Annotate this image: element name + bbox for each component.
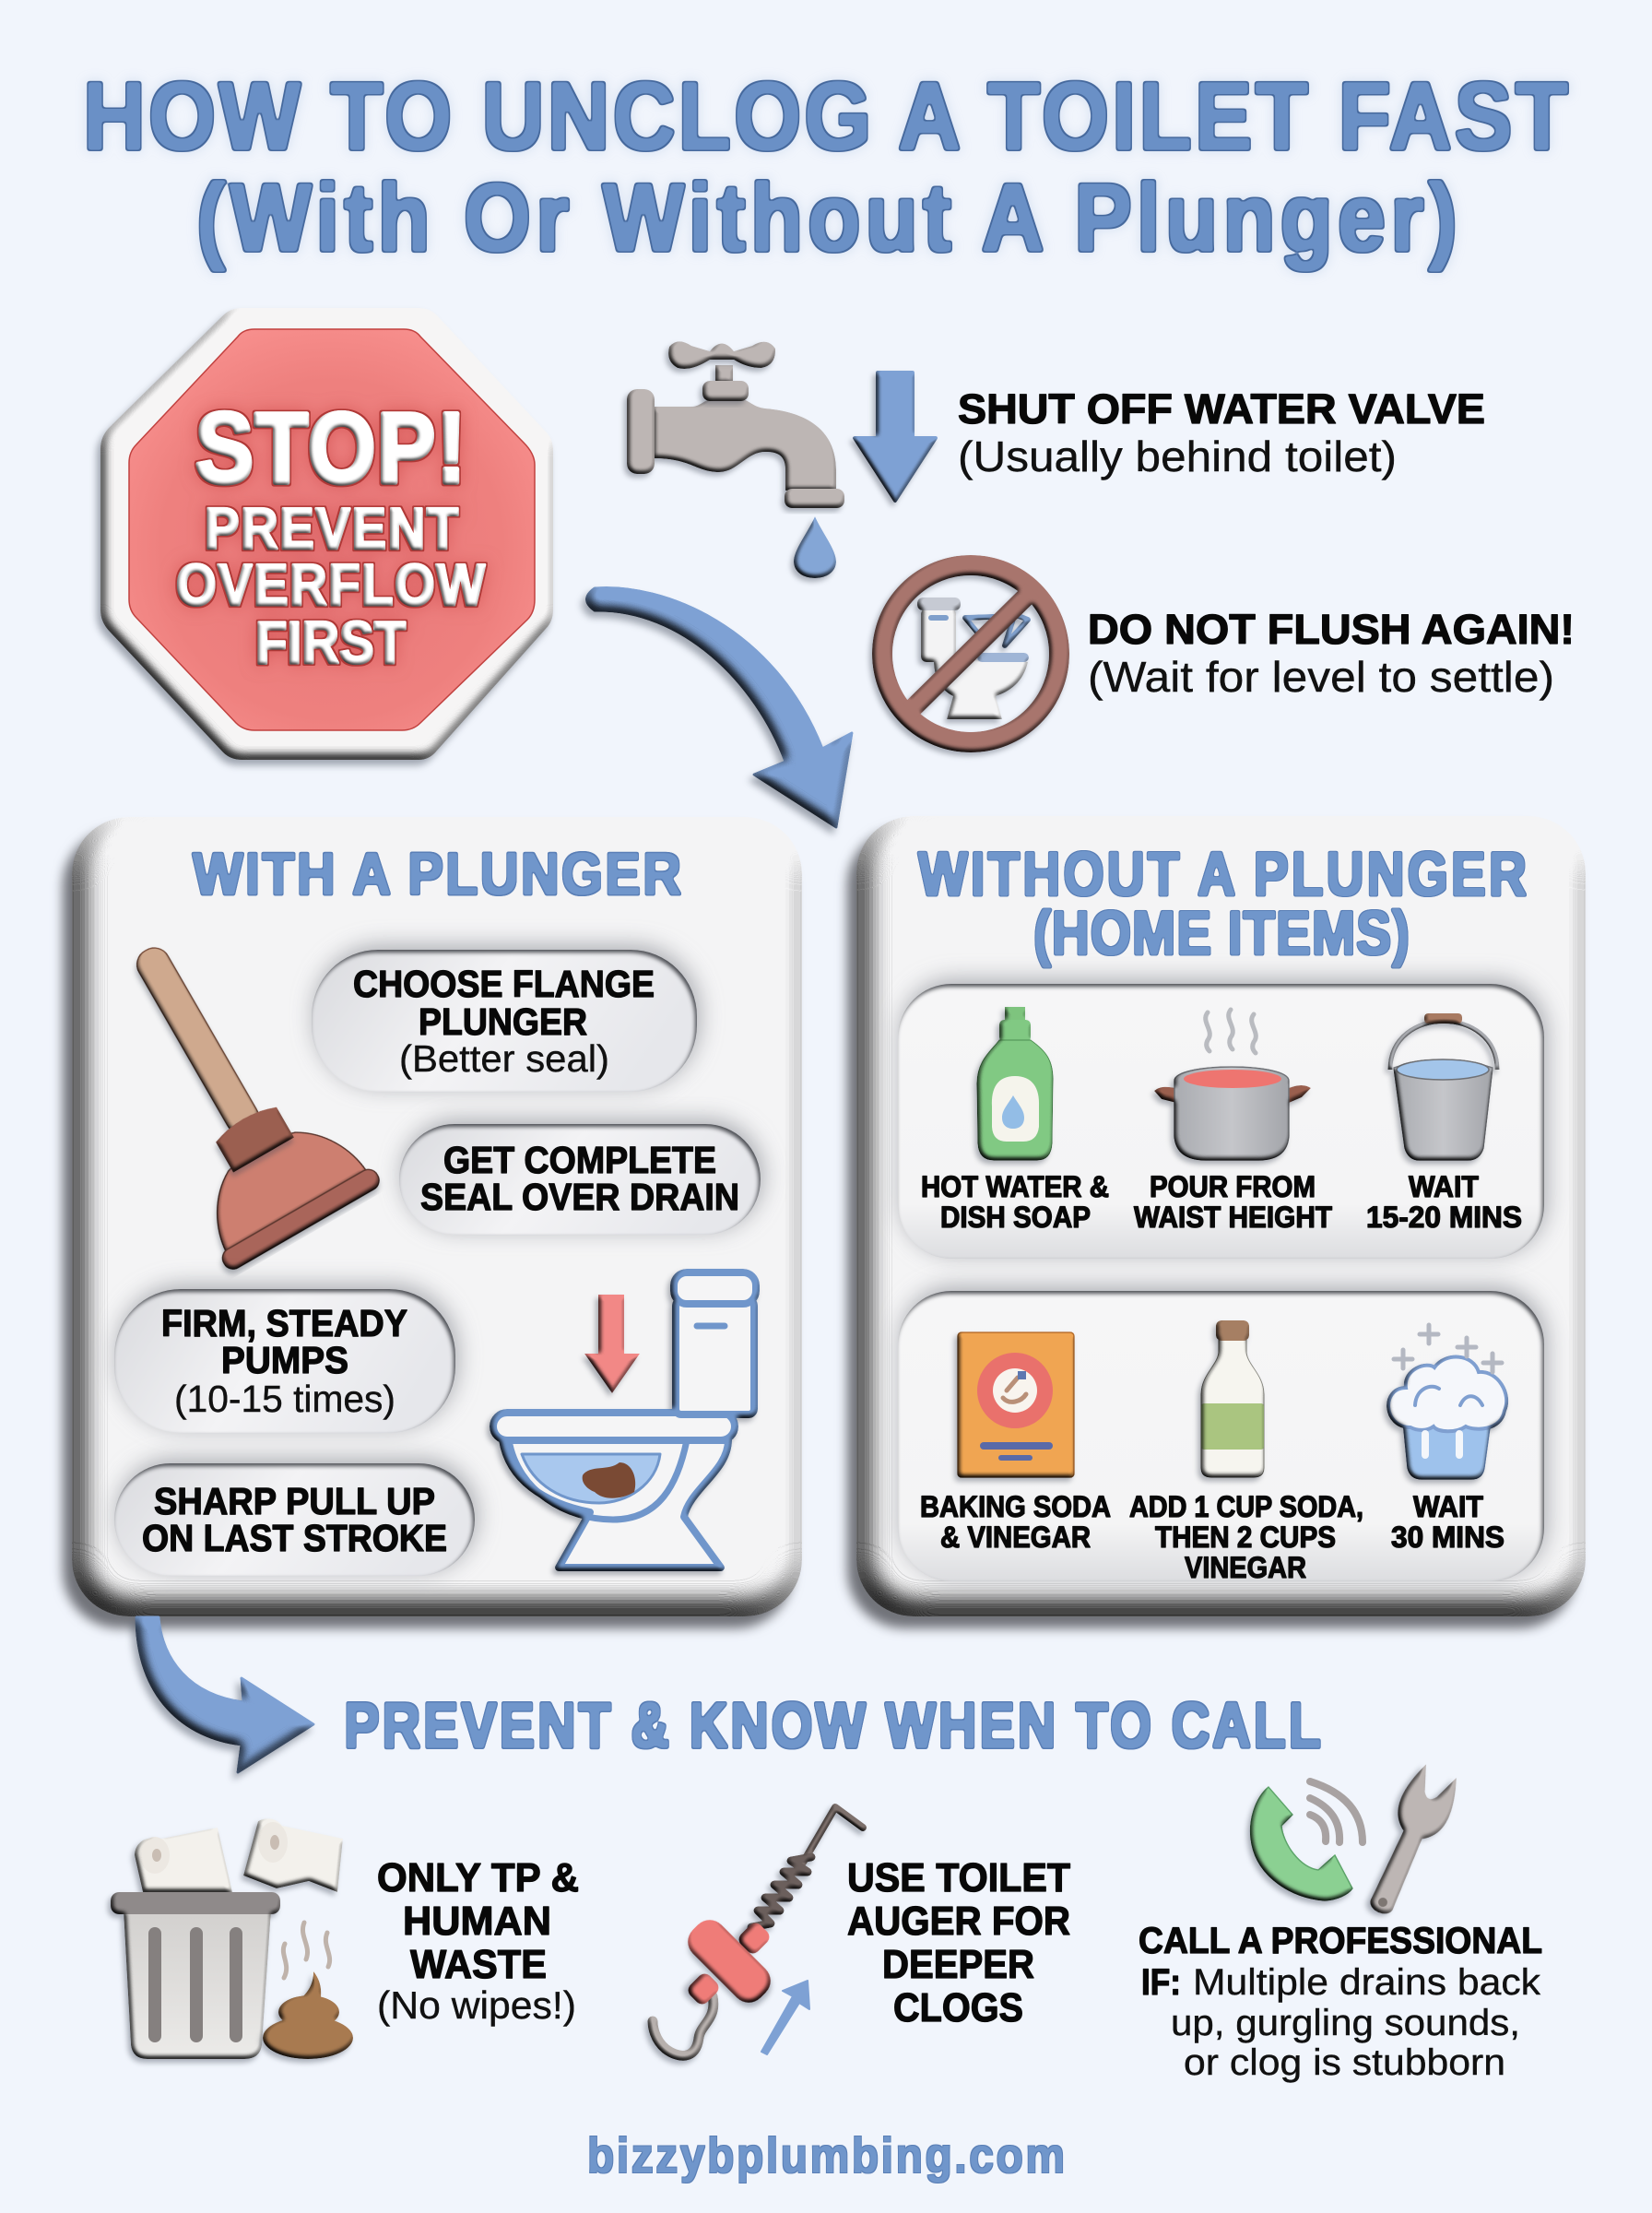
heading: prevent and call: PREVENT & KNOW WHEN TO CALL xyxy=(344,1689,1321,1761)
panel body xyxy=(72,817,802,1616)
text: only tp: ONLY TP & xyxy=(377,1855,579,1900)
text: only tp: HUMAN xyxy=(403,1899,551,1944)
text: shut off water valve: (Usually behind toilet) xyxy=(958,432,1397,480)
signal waves xyxy=(1310,1781,1363,1842)
steam xyxy=(1206,1010,1256,1053)
text: use toilet auger xyxy=(847,1855,1070,2030)
panel heading: WITH A PLUNGER xyxy=(193,841,681,908)
step: choose flange plunger: PLUNGER xyxy=(419,1000,587,1043)
step: choose flange plunger xyxy=(312,950,697,1092)
icon: vinegar bottle xyxy=(1201,1320,1264,1477)
text: only tp: WASTE xyxy=(410,1942,547,1987)
label: pour from waist xyxy=(1134,1170,1332,1234)
text: call a professional: or clog is stubborn xyxy=(1184,2042,1505,2083)
icon: faucet xyxy=(627,341,844,508)
icon: dish soap xyxy=(977,1007,1053,1160)
card: baking soda method xyxy=(898,1291,1544,1581)
step: get complete seal: GET COMPLETE xyxy=(443,1139,716,1181)
arrow: to prevention xyxy=(136,1617,313,1772)
label: pour from waist: WAIST HEIGHT xyxy=(1134,1201,1332,1234)
stop text: FIRST xyxy=(255,609,406,676)
phone handset xyxy=(1251,1787,1352,1900)
step: firm steady pumps: FIRM, STEADY xyxy=(161,1302,407,1344)
stop text: PREVENT xyxy=(205,496,458,562)
text: only tp: (No wipes!) xyxy=(377,1983,576,2027)
label: wait 30 xyxy=(1391,1490,1504,1554)
card: hot water method xyxy=(898,984,1544,1259)
icon: steaming pot xyxy=(1154,1010,1311,1160)
panel heading: WITHOUT A PLUNGER xyxy=(918,841,1527,909)
text: shut off water valve xyxy=(958,385,1485,480)
step: get complete seal xyxy=(399,1124,761,1235)
label: hot water: DISH SOAP xyxy=(940,1201,1091,1234)
text: only tp xyxy=(377,1855,579,2027)
waste steam xyxy=(283,1923,330,1978)
title xyxy=(83,63,1568,272)
label: baking soda: BAKING SODA xyxy=(920,1490,1111,1523)
step: firm steady pumps xyxy=(114,1289,455,1433)
icon: bucket xyxy=(1390,1013,1497,1160)
no flush toilet xyxy=(917,598,1029,719)
text: use toilet auger: CLOGS xyxy=(893,1985,1023,2030)
text: call a professional: CALL A PROFESSIONAL xyxy=(1139,1921,1542,1961)
panel: with a plunger xyxy=(69,817,802,1616)
label: wait 15-20: 15-20 MINS xyxy=(1366,1201,1522,1234)
text: call a professional xyxy=(1139,1921,1542,2083)
pot xyxy=(1154,1067,1311,1160)
auger crank and coil xyxy=(653,1807,863,2055)
step: sharp pull up: ON LAST STROKE xyxy=(142,1517,447,1559)
panel heading: (HOME ITEMS) xyxy=(1033,900,1410,968)
label: add soda and vinegar: ADD 1 CUP SODA, xyxy=(1129,1490,1363,1523)
panel heading xyxy=(918,841,1527,968)
icon: water drop xyxy=(794,516,836,578)
icon: toilet auger xyxy=(653,1807,863,2055)
text: call a professional: up, gurgling sounds, xyxy=(1171,2003,1520,2043)
label: add soda and vinegar: THEN 2 CUPS xyxy=(1155,1521,1336,1554)
text: shut off water valve: SHUT OFF WATER VALVE xyxy=(958,385,1485,432)
stop text: STOP! xyxy=(195,393,466,503)
auger handle xyxy=(681,1913,777,2009)
label: wait 30: 30 MINS xyxy=(1391,1521,1504,1554)
icon: phone and wrench xyxy=(1251,1760,1465,1923)
arrow: curved to panels xyxy=(586,588,852,827)
icon: trash can with toilet paper xyxy=(111,1818,343,2059)
octagon red face xyxy=(129,329,535,730)
label: wait 15-20 xyxy=(1366,1170,1522,1234)
text: do not flush: (Wait for level to settle) xyxy=(1088,653,1554,701)
arrow: plunge down xyxy=(584,1295,640,1393)
step: get complete seal: SEAL OVER DRAIN xyxy=(420,1176,739,1218)
label: wait 30: WAIT xyxy=(1413,1490,1483,1523)
label: add soda and vinegar xyxy=(1129,1490,1363,1584)
trash can body xyxy=(111,1892,280,2059)
waste pile xyxy=(263,1971,353,2059)
icon: foaming bucket xyxy=(1388,1325,1506,1479)
auger blue arrow xyxy=(761,1981,809,2054)
stop text: OVERFLOW xyxy=(176,552,486,618)
panel: without a plunger xyxy=(856,816,1586,1616)
octagon frame xyxy=(100,308,553,760)
stop text xyxy=(176,393,486,676)
icon: no flush xyxy=(882,565,1059,742)
text: use toilet auger: DEEPER xyxy=(882,1942,1034,1987)
label: pour from waist: POUR FROM xyxy=(1150,1170,1316,1203)
text: use toilet auger: AUGER FOR xyxy=(847,1899,1070,1944)
panel body xyxy=(856,816,1586,1616)
text: use toilet auger: USE TOILET xyxy=(847,1855,1070,1900)
text: do not flush: DO NOT FLUSH AGAIN! xyxy=(1088,606,1575,653)
step: choose flange plunger: CHOOSE FLANGE xyxy=(353,963,655,1005)
title: HOW TO UNCLOG A TOILET FAST xyxy=(83,63,1568,171)
step: choose flange plunger: (Better seal) xyxy=(399,1037,609,1080)
arrow: shut off down xyxy=(855,373,936,501)
website: bizzybplumbing.com xyxy=(587,2127,1065,2183)
step: sharp pull up xyxy=(114,1463,475,1576)
stop sign xyxy=(100,308,553,760)
title: (With Or Without A Plunger) xyxy=(196,164,1457,272)
icon: toilet outline xyxy=(493,1272,756,1568)
text: do not flush xyxy=(1088,606,1575,701)
step: firm steady pumps: PUMPS xyxy=(221,1339,348,1381)
label: hot water: HOT WATER & xyxy=(921,1170,1109,1203)
no flush ring xyxy=(882,565,1059,742)
text: call a professional: IF: xyxy=(1141,1962,1181,2003)
label: add soda and vinegar: VINEGAR xyxy=(1185,1551,1306,1584)
step: sharp pull up: SHARP PULL UP xyxy=(154,1480,435,1522)
sparkles xyxy=(1394,1325,1502,1372)
label: baking soda: & VINEGAR xyxy=(940,1521,1091,1554)
foam bucket xyxy=(1388,1357,1506,1479)
label: wait 15-20: WAIT xyxy=(1409,1170,1479,1203)
step: firm steady pumps: (10-15 times) xyxy=(174,1378,395,1420)
wrench xyxy=(1355,1760,1465,1923)
label: baking soda xyxy=(920,1490,1111,1554)
text: call a professional: Multiple drains back xyxy=(1193,1962,1541,2003)
icon: baking soda box xyxy=(958,1332,1074,1477)
icon: plunger xyxy=(69,906,383,1272)
toilet paper rolls xyxy=(135,1818,343,1892)
label: hot water xyxy=(921,1170,1109,1234)
icon: waste xyxy=(263,1923,353,2059)
